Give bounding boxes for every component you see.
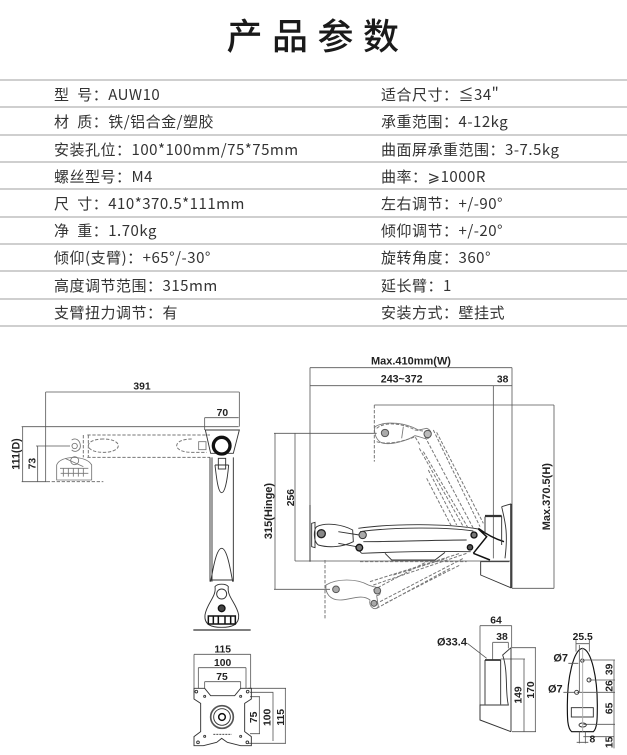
labels (263, 355, 553, 539)
labels: 100 (214, 658, 232, 669)
lower dashed arm (325, 553, 467, 618)
text: 高度调节范围：315mm (54, 275, 218, 296)
labels: Max.410mm(W) (371, 355, 451, 367)
labels: 243~372 (381, 373, 423, 385)
text: 倾仰(支臂)：+65°/-30° (54, 247, 211, 268)
labels: 65 (605, 702, 616, 714)
labels: Ø33.4 (437, 637, 468, 649)
labels: 149 (514, 686, 525, 704)
diagram: top view of arm (11, 381, 251, 630)
text: 型 号：AUW10 (54, 84, 160, 105)
labels: 26 (605, 680, 616, 692)
labels: 38 (496, 632, 508, 643)
text: 支臂扭力调节：有 (54, 302, 178, 323)
text: 倾仰调节：+/-20° (381, 220, 503, 241)
text: 左右调节：+/-90° (381, 193, 503, 214)
labels: 25.5 (573, 632, 593, 643)
front plate (567, 648, 597, 732)
text: 旋转角度：360° (381, 247, 491, 268)
text: 曲率：⩾1000R (381, 166, 486, 187)
labels: 115 (214, 645, 231, 656)
labels: 70 (217, 408, 228, 419)
labels: 15 (605, 736, 616, 748)
labels: 75 (216, 672, 228, 683)
labels: 256 (286, 489, 297, 506)
text: 曲面屏承重范围：3-7.5kg (381, 139, 559, 160)
diagram: VESA plate (194, 645, 287, 746)
title: 产品参数 (226, 8, 408, 60)
labels: 38 (497, 374, 509, 385)
text: 尺 寸：410*370.5*111mm (54, 193, 245, 214)
primary arm (312, 522, 478, 560)
upper dashed arm (374, 405, 483, 528)
labels: Max.370.5(H) (541, 463, 553, 530)
labels (437, 615, 616, 748)
text: 安装方式：壁挂式 (381, 302, 505, 323)
labels: 170 (526, 681, 537, 699)
labels (11, 381, 228, 470)
wall bracket (481, 504, 512, 588)
diagram: side view of arm (263, 355, 554, 618)
labels: 391 (133, 381, 151, 392)
labels (214, 645, 287, 726)
labels: 8 (589, 734, 595, 745)
text: 材 质：铁/铝合金/塑胶 (54, 111, 214, 132)
text: 净 重：1.70kg (54, 220, 157, 241)
labels: 73 (27, 458, 38, 469)
labels: Ø7 (553, 652, 568, 664)
text: 延长臂：1 (381, 275, 452, 296)
text: 安装孔位：100*100mm/75*75mm (54, 139, 299, 160)
text: 适合尺寸：≦34" (381, 84, 499, 105)
labels: 111(D) (11, 438, 23, 470)
labels: 115 (276, 709, 287, 726)
labels: 39 (605, 663, 616, 675)
labels: 315(Hinge) (263, 483, 275, 539)
labels: 64 (490, 615, 502, 626)
panel: specification table (0, 79, 627, 327)
labels: 100 (262, 708, 273, 726)
text: 螺丝型号：M4 (54, 166, 153, 187)
labels: Ø7 (548, 684, 563, 696)
text: 承重范围：4-12kg (381, 111, 508, 132)
diagram: wall bracket front and side (437, 615, 616, 748)
labels: 75 (249, 711, 260, 723)
